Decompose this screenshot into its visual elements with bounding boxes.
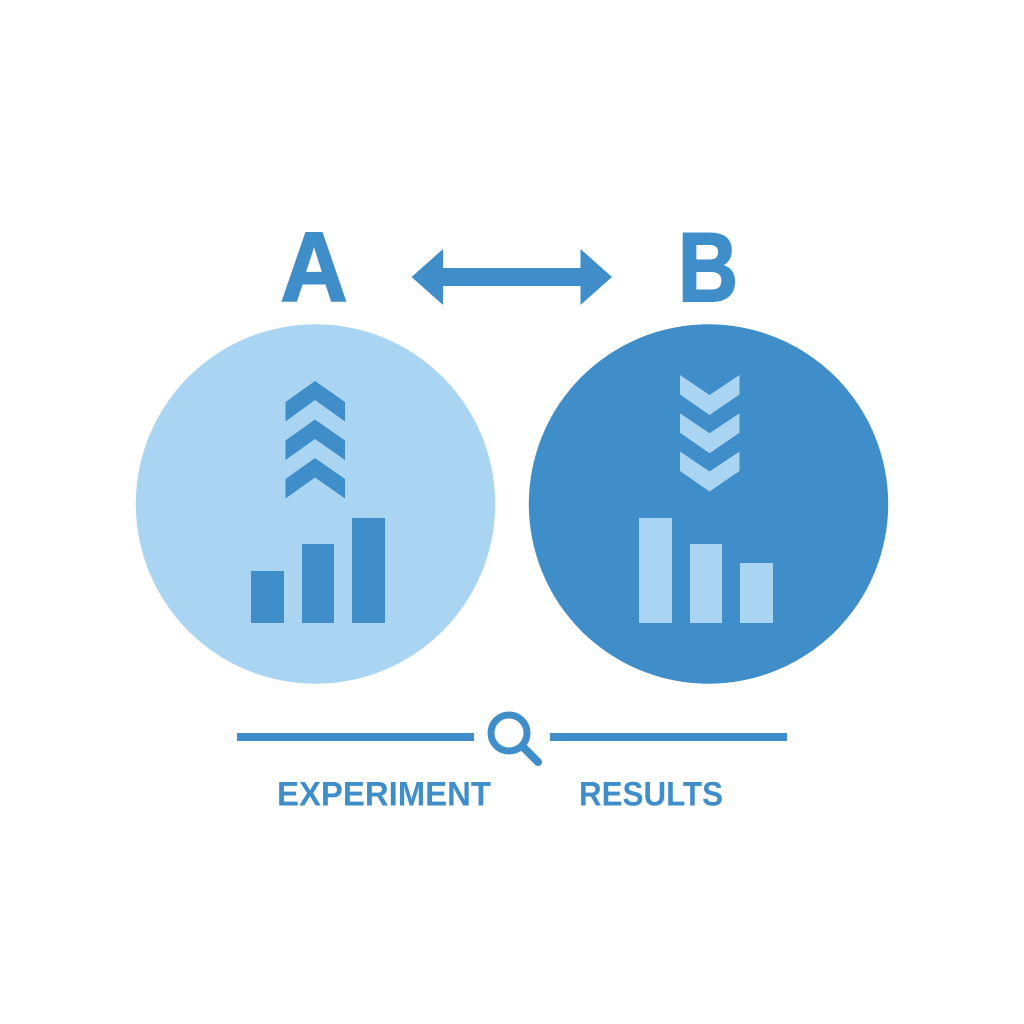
double-headed arrow bbox=[412, 249, 612, 305]
icon: magnifying glass bbox=[491, 715, 538, 762]
bar chart: falling bars bbox=[639, 518, 773, 623]
label: results: RESULTS bbox=[579, 776, 723, 814]
divider right bbox=[550, 733, 787, 741]
icon: down chevrons bbox=[680, 375, 740, 492]
divider left bbox=[237, 733, 474, 741]
panel: variant A circle bbox=[136, 324, 495, 684]
label A: A bbox=[280, 212, 348, 322]
label B: B bbox=[678, 212, 738, 322]
bar chart: rising bars bbox=[251, 518, 385, 623]
panel: variant B circle bbox=[529, 324, 888, 684]
icon: up chevrons bbox=[286, 381, 345, 498]
label: experiment: EXPERIMENT bbox=[277, 776, 491, 814]
